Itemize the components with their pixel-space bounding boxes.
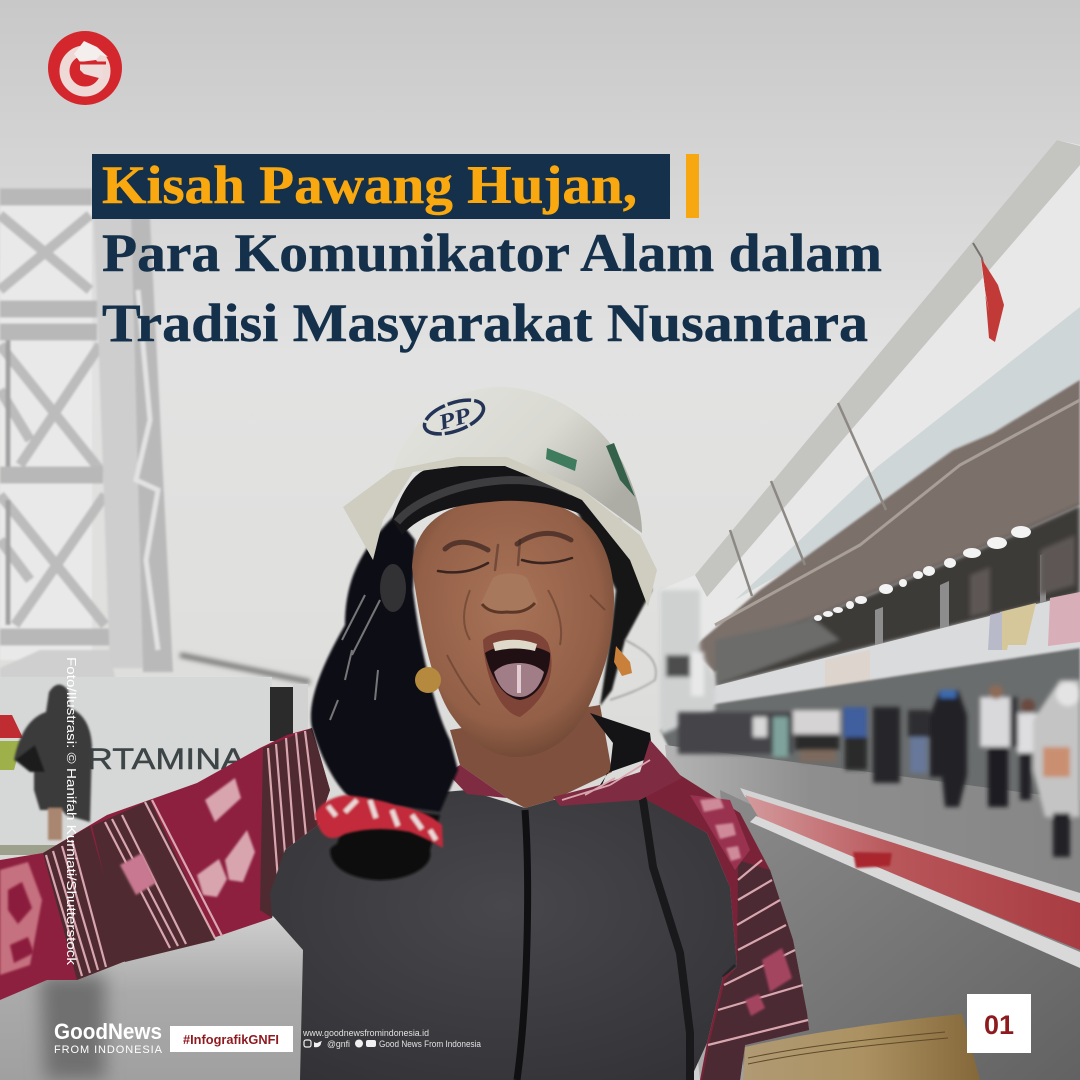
ear muff <box>380 564 406 612</box>
glazed upper band <box>735 307 1080 600</box>
woman: neck <box>450 705 612 808</box>
zipper <box>517 810 528 1080</box>
sleeve ikat motifs <box>0 862 42 975</box>
upper stand crowd <box>715 505 1080 686</box>
ground: wet track left <box>0 920 320 1080</box>
title: Tradisi Masyarakat Nusantara <box>102 293 868 353</box>
title: Kisah Pawang Hujan, <box>102 155 637 215</box>
sleeve stripes <box>43 826 128 980</box>
black cap under helmet brim <box>392 462 625 555</box>
title highlight bar <box>92 154 670 219</box>
crowd on the pit lane <box>678 680 1080 857</box>
nose <box>481 574 538 614</box>
PP logo on hat <box>420 393 488 441</box>
person standing by banner <box>14 684 92 840</box>
footer: web and social links <box>302 1028 481 1049</box>
footer: web and social links: www.goodnewsfromindonesia.id <box>302 1028 429 1038</box>
footer: hashtag box: #InfografikGNFI <box>183 1032 279 1047</box>
roof fascia <box>695 140 1080 597</box>
woman: long black hair <box>311 503 656 880</box>
page number badge <box>967 994 1031 1053</box>
PP logo on hat: PP <box>434 402 474 435</box>
white highlights in hair <box>330 595 380 720</box>
green MSA sticker <box>546 448 577 471</box>
pit garages <box>660 648 1080 830</box>
woman: left sleeve with ikat pattern <box>0 728 330 1000</box>
brim <box>343 457 657 607</box>
title <box>102 155 882 353</box>
footer: GoodNews logo: FROM INDONESIA <box>54 1044 163 1056</box>
steel lattice tower <box>0 180 310 682</box>
red and white scrunchie <box>315 795 443 848</box>
grey headband <box>397 480 572 522</box>
title: Para Komunikator Alam dalam <box>102 223 882 283</box>
sponsor banner: RTAMINA <box>87 743 245 776</box>
grandstand building <box>660 140 1080 830</box>
dome <box>393 387 642 533</box>
photo credit: Foto/Ilustrasi: © Hanifah Kurniati/Shutterstock <box>64 657 79 966</box>
footer: web and social links: Good News From Indonesia <box>379 1039 481 1049</box>
sponsor banner <box>0 677 308 855</box>
hard hat <box>343 387 657 607</box>
canopy lights <box>814 526 1031 621</box>
earrings <box>415 646 632 693</box>
footer: GoodNews logo <box>54 1019 163 1056</box>
drawcord <box>640 780 690 1080</box>
green side emblem <box>606 443 635 497</box>
far pit building <box>660 590 715 735</box>
footer: web and social links: @gnfi <box>327 1039 350 1049</box>
logo: red garuda circle <box>48 31 122 105</box>
woman: hood lining and collar <box>447 713 682 806</box>
open mouth <box>483 630 552 717</box>
red flag on roof <box>973 243 1004 342</box>
forehead wrinkles and cheeks <box>447 590 605 705</box>
title accent bar <box>686 154 699 218</box>
woman: face <box>412 498 614 757</box>
singing bowl <box>743 1014 980 1080</box>
brows and closed eyes <box>438 533 572 572</box>
pit banner <box>715 593 1080 704</box>
footer: GoodNews logo: GoodNews <box>54 1019 162 1044</box>
footer: hashtag box <box>170 1026 293 1052</box>
page number badge: 01 <box>984 1010 1014 1040</box>
ground: pit lane <box>665 745 1080 1080</box>
woman: hoodie body <box>270 780 737 1080</box>
roof hangers <box>730 403 886 596</box>
brown canopy roof <box>690 380 1080 672</box>
woman: right sleeve <box>640 740 809 1080</box>
